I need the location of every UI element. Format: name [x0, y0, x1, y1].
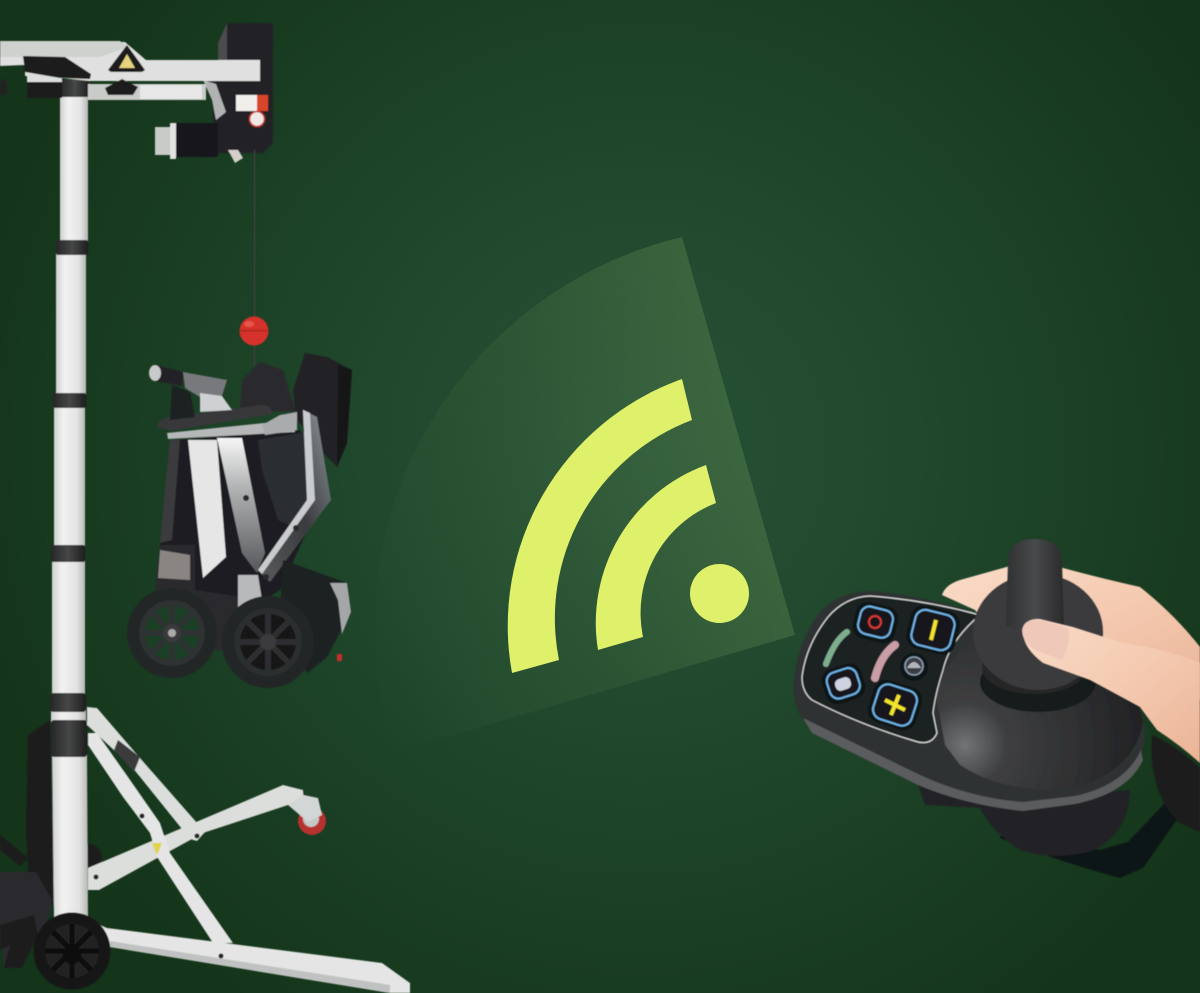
white side panel: [188, 440, 226, 578]
base bar: [100, 925, 410, 993]
collar ring: [980, 652, 1096, 712]
rear wheel: [222, 596, 314, 688]
diagonal strut: [88, 733, 233, 943]
controller body: [793, 591, 1145, 807]
lower housing: [918, 785, 1130, 856]
lower legs: [87, 707, 410, 993]
joystick controller: [793, 539, 1200, 878]
horn button: [900, 653, 928, 681]
rear strap and battery: [0, 720, 102, 968]
button: minus: [903, 603, 963, 657]
seat: [240, 362, 296, 412]
battery LED strip: [826, 632, 847, 664]
hand behind joystick: [942, 566, 1200, 700]
chrome folding arm: [258, 410, 331, 582]
armrest: [157, 405, 272, 431]
horizontal support arm: [88, 785, 304, 890]
tail light: [337, 654, 342, 661]
front wheel: [127, 588, 217, 678]
steering handle: [149, 365, 232, 420]
silver strut: [217, 438, 265, 573]
warning label: [236, 95, 268, 111]
control panel face: [802, 596, 980, 743]
button: plus: [864, 676, 926, 734]
mounting bracket: [1000, 800, 1180, 878]
button: power: [850, 599, 901, 646]
backrest: [293, 353, 352, 467]
lift cable: [254, 150, 256, 366]
red ball: [240, 316, 268, 346]
joystick knob: [1006, 539, 1064, 632]
caster wheel: [288, 795, 326, 835]
dome: [935, 630, 1143, 789]
upper brace: [87, 707, 205, 841]
lift pole: [50, 80, 90, 918]
signal fan sector: [375, 237, 795, 752]
winch motor: [172, 123, 218, 157]
warning sticker: [152, 843, 162, 855]
folded scooter: [127, 353, 352, 688]
crane arm: [0, 41, 260, 100]
winch box: [155, 23, 273, 163]
lower rim: [803, 718, 1143, 811]
arm support bar: [167, 420, 295, 439]
speed LED strip: [875, 645, 895, 678]
joystick disc: [973, 574, 1103, 690]
fingernail: [1022, 620, 1069, 660]
hand fingers front: [1022, 619, 1200, 763]
lower triangle plate: [105, 79, 138, 95]
button: menu: [818, 660, 869, 707]
battery case: [280, 560, 350, 673]
outer signal arc: [508, 379, 692, 673]
inner signal arc: [596, 465, 716, 650]
icon: wifi signal: [508, 379, 749, 673]
warning triangle plate: [108, 45, 145, 72]
lift crane: [0, 23, 410, 993]
signal dot: [690, 564, 749, 623]
base wheel: [0, 912, 110, 990]
main body: [160, 430, 318, 610]
arm bracket: [23, 56, 91, 79]
chassis: [155, 545, 300, 650]
